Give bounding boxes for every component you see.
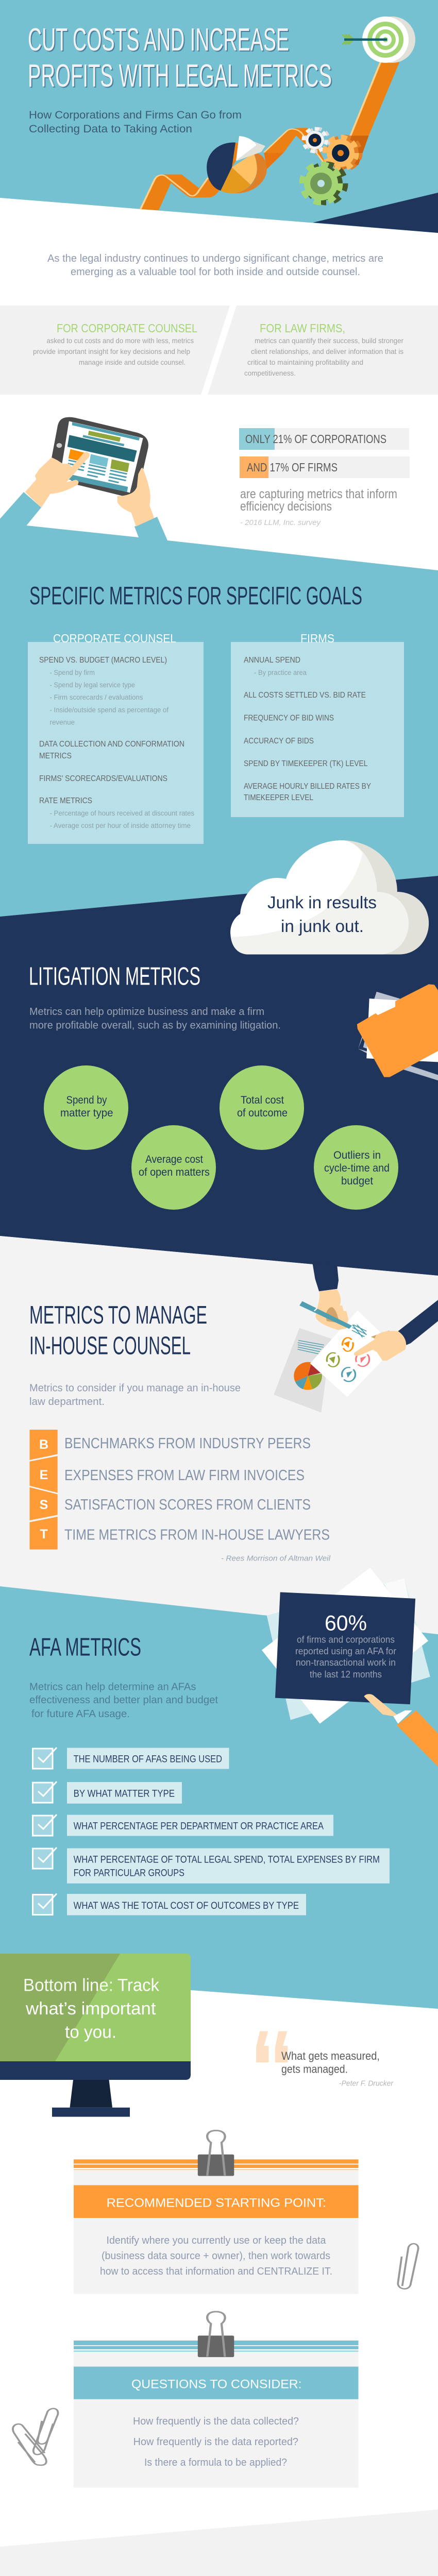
panel: questions to consider: [74, 2312, 359, 2488]
stat caption: efficiency decisions: [240, 499, 332, 514]
monitor: bottom line: to you.: [65, 2023, 116, 2042]
B.E.S.T. acronym column: [29, 1430, 58, 1549]
metric circle: spend by matter type: [44, 1065, 128, 1150]
callout: 60 percent stat card: of firms and corporations: [297, 1635, 395, 1645]
B.E.S.T. letters: [39, 1437, 48, 1541]
illustration: hands reviewing report: [274, 1262, 438, 1413]
text: litigation intro: Metrics can help optimize business and make a firm: [29, 1006, 264, 1018]
text: AFA intro: [29, 1682, 218, 1720]
monitor: bottom line: what’s important: [25, 1999, 156, 2019]
subtitle: Collecting Data to Taking Action: [29, 123, 192, 135]
section background: specific metrics: [0, 492, 438, 917]
infographic: final thoughts and footer: [0, 2510, 438, 2576]
panel: corporate counsel metrics: [28, 632, 204, 844]
metric circle: spend by matter type: matter type: [60, 1107, 113, 1119]
illustration: hands holding tablet: [25, 417, 154, 527]
heading: metrics to manage in-house counsel: IN-HOUSE COUNSEL: [29, 1332, 191, 1360]
panel: recommended starting point: [74, 2130, 359, 2294]
body: corporate counsel: asked to cut costs and do more with less, metrics: [46, 336, 194, 345]
navy corner triangle: [313, 193, 438, 233]
B.E.S.T. letters: B: [39, 1437, 48, 1452]
checklist item 4: [33, 1848, 390, 1884]
checklist item 2: BY WHAT MATTER TYPE: [74, 1789, 175, 1799]
callout: 60 percent stat card: 60%: [325, 1611, 367, 1635]
list: corporate counsel: DATA COLLECTION AND CONFORMATION: [39, 740, 184, 749]
white gear: [304, 129, 329, 151]
list: firms: ALL COSTS SETTLED VS. BID RATE: [244, 691, 366, 700]
body: recommended starting point: Identify where you currently use or keep the data: [106, 2235, 326, 2246]
list: corporate counsel: FIRMS' SCORECARDS/EVALUATIONS: [39, 774, 167, 783]
quote: Drucker: What gets measured,: [281, 2049, 380, 2062]
subtitle: How Corporations and Firms Can Go from: [29, 109, 242, 121]
list: firms: - By practice area: [254, 669, 307, 676]
checklist item 4: WHAT PERCENTAGE OF TOTAL LEGAL SPEND, TOTAL EXPENSES BY FIRM: [74, 1855, 380, 1866]
metric circle: total cost of outcome: [220, 1065, 304, 1150]
heading: AFA metrics: AFA METRICS: [29, 1634, 141, 1662]
source: - 2016 LLM, Inc. survey: [240, 518, 321, 527]
monitor: bottom line: [0, 1954, 191, 2117]
section background: final thoughts: [0, 2510, 438, 2576]
green gear: [302, 164, 345, 202]
subtitle: [29, 109, 242, 135]
checklist item 5: WHAT WAS THE TOTAL COST OF OUTCOMES BY TYPE: [74, 1901, 299, 1911]
checklist item 4: FOR PARTICULAR GROUPS: [74, 1868, 184, 1878]
text: litigation intro: [29, 1006, 281, 1031]
growth chart illustration: [140, 16, 415, 210]
body: recommended starting point: [100, 2235, 332, 2277]
list: corporate counsel: - Spend by legal service type: [49, 681, 135, 689]
binder clip: [198, 2312, 234, 2357]
B.E.S.T. letters: E: [40, 1468, 48, 1482]
quote: Drucker: -Peter F. Drucker: [339, 2079, 394, 2088]
callout: 60 percent stat card: the last 12 months: [310, 1669, 382, 1680]
body: questions: Is there a formula to be applied?: [144, 2457, 287, 2468]
intro text: emerging as a valuable tool for both inside and outside counsel.: [71, 266, 360, 278]
list: corporate counsel: - Firm scorecards / evaluations: [49, 693, 143, 701]
heading: recommended starting point: RECOMMENDED STARTING POINT:: [107, 2196, 326, 2210]
text: AFA intro: for future AFA usage.: [31, 1708, 130, 1720]
list: firms: ACCURACY OF BIDS: [244, 737, 314, 745]
body: corporate counsel: manage inside and outside counsel.: [79, 358, 186, 366]
metric circle: total cost of outcome: Total cost: [241, 1094, 284, 1106]
body: law firms: competitiveness.: [244, 369, 296, 377]
stat caption: [240, 487, 397, 527]
B.E.S.T. list: SATISFACTION SCORES FROM CLIENTS: [64, 1497, 311, 1513]
list: firms: AVERAGE HOURLY BILLED RATES BY: [244, 782, 371, 791]
metric circle: outliers: cycle-time and: [324, 1162, 390, 1174]
list: firms: SPEND BY TIMEKEEPER (TK) LEVEL: [244, 759, 368, 768]
list: firms: ANNUAL SPEND: [244, 656, 300, 665]
header background: [0, 0, 438, 233]
B.E.S.T. letters: T: [40, 1527, 48, 1541]
heading: metrics to manage in-house counsel: [29, 1301, 207, 1360]
checklist item 2: [33, 1782, 182, 1804]
text: in-house intro: law department.: [29, 1396, 105, 1408]
list: corporate counsel: RATE METRICS: [39, 796, 92, 805]
quote: Drucker: [256, 2031, 394, 2088]
monitor: bottom line: Track: [117, 1976, 160, 1995]
body: questions: [133, 2416, 299, 2468]
heading: corporate counsel: FOR CORPORATE COUNSEL: [57, 321, 197, 335]
panel: firms metrics: [231, 632, 404, 817]
body: law firms: critical to maintaining profitability and: [247, 358, 363, 366]
checklist item 3: WHAT PERCENTAGE PER DEPARTMENT OR PRACTICE AREA: [74, 1821, 324, 1832]
icon: paperclips left: [13, 2409, 58, 2465]
B.E.S.T. list: EXPENSES FROM LAW FIRM INVOICES: [64, 1467, 305, 1484]
text: litigation intro: more profitable overall, such as by examining litigation.: [29, 1020, 281, 1031]
quote: Drucker: gets managed.: [281, 2063, 348, 2076]
B.E.S.T. list: TIME METRICS FROM IN-HOUSE LAWYERS: [64, 1527, 330, 1544]
list: corporate counsel: revenue: [49, 718, 75, 726]
B.E.S.T. list: BENCHMARKS FROM INDUSTRY PEERS: [64, 1435, 311, 1452]
heading: metrics to manage in-house counsel: METRICS TO MANAGE: [29, 1301, 207, 1329]
list: corporate counsel: METRICS: [39, 752, 72, 760]
list: firms: FREQUENCY OF BID WINS: [244, 714, 334, 723]
list: corporate counsel: [39, 656, 194, 829]
text: in-house intro: [29, 1383, 241, 1408]
B.E.S.T. letters: S: [40, 1498, 48, 1512]
target with arrow: [342, 16, 415, 63]
stat: and 17 percent of firms: [240, 456, 410, 478]
list: corporate counsel: - Percentage of hours received at discount rates: [49, 809, 194, 817]
stat caption: are capturing metrics that inform: [240, 487, 397, 501]
heading: litigation metrics: LITIGATION METRICS: [29, 962, 200, 990]
callout: 60 percent stat card: non-transactional work in: [296, 1657, 396, 1668]
section background: litigation: [0, 876, 438, 1276]
heading: law firms: FOR LAW FIRMS,: [260, 321, 345, 335]
list: firms: [244, 656, 371, 802]
stat: only 21 percent of corporations: ONLY 21% OF CORPORATIONS: [245, 432, 386, 446]
list: corporate counsel: - Average cost per hour of inside attorney time: [49, 822, 191, 829]
callout: cloud: [230, 840, 429, 954]
panel: for corporate counsel: [0, 306, 230, 395]
callout: cloud: in junk out.: [281, 917, 364, 936]
body: recommended starting point: how to access that information and CENTRALIZE IT.: [100, 2266, 332, 2277]
B.E.S.T. list: [64, 1435, 330, 1544]
stat: and 17 percent of firms: AND 17% OF FIRMS: [247, 461, 338, 474]
body: questions: How frequently is the data collected?: [133, 2416, 299, 2427]
metric circle: outliers: budget: [341, 1175, 373, 1187]
intro text: [47, 253, 383, 278]
heading: questions to consider: QUESTIONS TO CONSIDER:: [131, 2377, 302, 2391]
monitor: bottom line: Bottom line:: [23, 1976, 113, 1995]
section background: in-house counsel: [0, 1236, 438, 1634]
metric circle: outliers: [314, 1125, 398, 1210]
intro text: As the legal industry continues to undergo significant change, metrics are: [47, 253, 383, 264]
callout: 60 percent stat card: reported using an AFA for: [295, 1646, 396, 1656]
checklist item 1: [33, 1748, 229, 1769]
section background: AFA metrics: [0, 1586, 438, 2009]
column heading: firms: FIRMS: [300, 632, 334, 645]
icon: quotation mark: [256, 2031, 288, 2062]
body: recommended starting point: (business data source + owner), then work towards: [102, 2250, 330, 2262]
body: law firms: metrics can quantify their success, build stronger: [255, 336, 403, 345]
metric circle: average cost of open matters: Average cost: [145, 1154, 203, 1165]
list: firms: TIMEKEEPER LEVEL: [244, 793, 313, 802]
body: corporate counsel: provide important insight for key decisions and help: [33, 347, 190, 355]
metric circle: outliers: Outliers in: [333, 1149, 381, 1161]
panel: for law firms: [208, 306, 438, 395]
metric circle: average cost of open matters: of open matters: [139, 1166, 210, 1178]
checklist item 3: [33, 1815, 333, 1836]
body: corporate counsel: [33, 336, 194, 366]
list: corporate counsel: - Inside/outside spend as percentage of: [49, 706, 169, 714]
text: in-house intro: Metrics to consider if you manage an in-house: [29, 1383, 241, 1394]
checklist item 5: [33, 1894, 306, 1916]
binder clip: [198, 2130, 234, 2176]
attribution: Rees Morrison: - Rees Morrison of Altman Weil: [221, 1554, 331, 1563]
text: AFA intro: effectiveness and better plan and budget: [29, 1694, 218, 1706]
icon: folder with papers: [357, 984, 438, 1080]
checklist item 1: THE NUMBER OF AFAS BEING USED: [74, 1754, 222, 1765]
icon: paperclip right: [398, 2244, 418, 2289]
text: AFA intro: Metrics can help determine an AFAs: [29, 1682, 196, 1693]
body: law firms: [244, 336, 403, 377]
body: questions: How frequently is the data reported?: [133, 2436, 298, 2448]
orange gear: [325, 137, 360, 169]
title: [28, 22, 332, 94]
column heading: corporate counsel: CORPORATE COUNSEL: [53, 632, 176, 645]
list: corporate counsel: - Spend by firm: [49, 669, 95, 676]
callout: cloud: Junk in results: [267, 893, 377, 912]
body: law firms: client relationships, and deliver information that is: [251, 347, 403, 355]
stat: only 21 percent of corporations: [239, 428, 409, 450]
metric circle: spend by matter type: Spend by: [66, 1094, 107, 1106]
metric circle: average cost of open matters: [131, 1125, 216, 1210]
metric circle: total cost of outcome: of outcome: [237, 1107, 288, 1119]
callout: 60 percent stat card: [262, 1568, 438, 1767]
list: corporate counsel: SPEND VS. BUDGET (MACRO LEVEL): [39, 656, 167, 665]
